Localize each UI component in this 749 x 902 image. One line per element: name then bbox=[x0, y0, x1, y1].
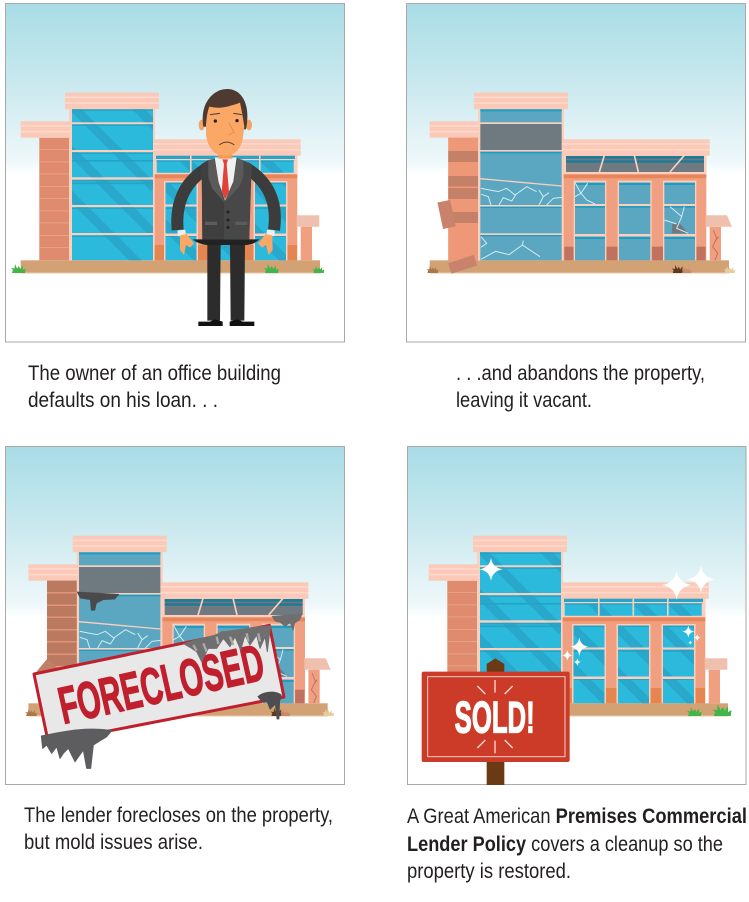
mold on upper right window bbox=[272, 613, 303, 632]
caption 3: The lender forecloses on the property, bbox=[24, 804, 333, 827]
mold on tower bbox=[77, 592, 119, 611]
caption 2: leaving it vacant. bbox=[456, 389, 592, 412]
caption 1 bbox=[28, 362, 281, 412]
caption 1: The owner of an office building bbox=[28, 362, 281, 385]
caption 3: but mold issues arise. bbox=[24, 831, 203, 854]
mold on sign, bottom left bbox=[41, 729, 112, 768]
panel 1: owner defaults bbox=[6, 4, 344, 342]
mold on sign, bottom right bbox=[257, 692, 282, 719]
caption 3 bbox=[24, 804, 333, 854]
building: restored bbox=[429, 494, 731, 718]
panel 2: vacant building bbox=[406, 4, 746, 342]
building: intact office bbox=[11, 51, 324, 275]
caption 4: Lender Policy covers a cleanup so the bbox=[407, 833, 723, 856]
sparkles bbox=[479, 558, 715, 666]
mold on sign, top right bbox=[184, 626, 271, 662]
building: moldy and damaged bbox=[25, 536, 334, 716]
panel 4: sold and restored bbox=[408, 446, 746, 785]
man with empty pockets bbox=[177, 89, 275, 326]
sold sign bbox=[422, 658, 570, 785]
caption 2 bbox=[456, 362, 705, 412]
building: abandoned and damaged bbox=[427, 93, 735, 274]
caption 2: . . .and abandons the property, bbox=[456, 362, 705, 385]
caption 1: defaults on his loan. . . bbox=[28, 389, 218, 412]
caption 4 bbox=[407, 805, 747, 883]
caption 4: property is restored. bbox=[407, 860, 571, 883]
panel 3: foreclosed bbox=[6, 446, 344, 784]
sold sign: SOLD! bbox=[455, 693, 535, 742]
foreclosed sign: FORECLOSED bbox=[53, 634, 269, 736]
foreclosed sign bbox=[34, 592, 303, 768]
